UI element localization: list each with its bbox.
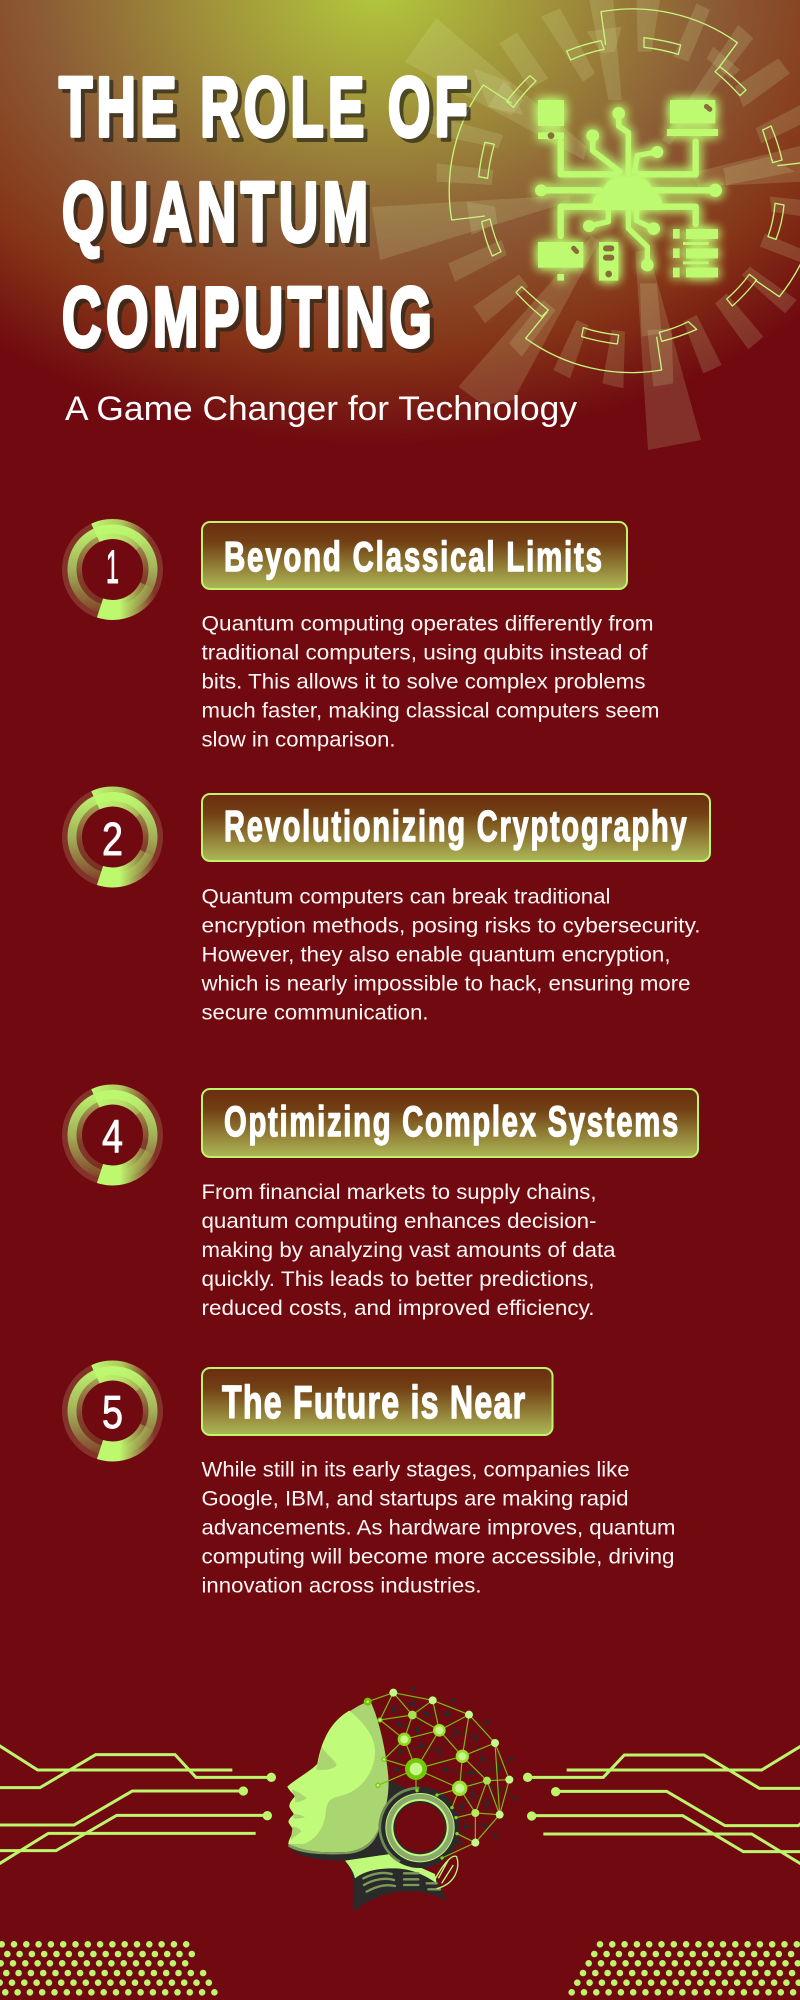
number badge 5 [65,1360,160,1461]
tech ring outlines [449,9,800,373]
body text 2: However, they also enable quantum encryption, [202,943,670,966]
icon: laptop top right [667,100,718,136]
body text 4 [202,1181,616,1320]
top arc [601,9,737,68]
heading box 5: The Future is Near [222,1377,525,1428]
facial shadows [291,1747,337,1840]
number badge 4 [65,1084,160,1185]
body text 4: quantum computing enhances decision- [202,1210,597,1233]
heading box 1: Beyond Classical Limits [224,533,602,580]
heading box 4 [202,1089,698,1157]
title: THE ROLE OF [59,61,468,155]
neural network nodes [364,1689,513,1860]
body text 5 [202,1459,676,1598]
small ring segments [567,41,604,60]
body text 1: Quantum computing operates differently from [202,613,654,636]
number badge 4: 4 [102,1110,123,1162]
heading box 2 [202,794,710,861]
face rim shadow [288,1823,381,1854]
body text 5: advancements. As hardware improves, quantum [202,1517,676,1540]
body text 5: Google, IBM, and startups are making rapid [202,1488,628,1511]
right arc [755,163,800,297]
bottom arc [526,312,662,373]
icon: desktop top left [538,100,564,139]
body text 2 [200,885,700,1024]
chip dome [593,177,663,210]
heading box 4: Optimizing Complex Systems [224,1097,678,1145]
body text 4: making by analyzing vast amounts of data [202,1239,616,1262]
body text 1: bits. This allows it to solve complex problems [202,671,646,694]
icon: quantum chip with connected devices [535,100,722,281]
title [59,61,468,365]
circuit traces [541,113,715,265]
heading box 1 [202,522,627,589]
section 1 [65,519,660,752]
section 4 [65,1084,698,1320]
body text 2: secure communication. [202,1001,428,1024]
secondary dark network [391,1687,518,1845]
header background glow [0,0,800,470]
body text 4: reduced costs, and improved efficiency. [202,1297,594,1320]
icon: list panel [673,229,718,277]
subtitle: A Game Changer for Technology [65,390,577,428]
face front highlight [287,1711,375,1844]
body text 2: Quantum computers can break traditional [202,885,610,908]
body text 2: which is nearly impossible to hack, ensuring more [200,972,690,995]
icon: device bottom left [538,242,583,281]
body text 4: From financial markets to supply chains, [202,1181,596,1204]
face back [287,1701,389,1852]
icon: server tower [599,242,618,281]
jaw shadow [288,1780,408,1861]
head rings [379,1787,460,1868]
title: QUANTUM [62,166,368,260]
left arc [449,85,512,220]
radiating light rays [372,0,800,450]
dot pattern bottom left [0,1944,215,1992]
neck [345,1854,458,1912]
body text 1 [202,613,660,752]
heading box 2: Revolutionizing Cryptography [224,801,687,850]
dot pattern bottom right [572,1944,800,1992]
title: COMPUTING [62,271,432,365]
number badge 1 [65,519,160,620]
body text 5: innovation across industries. [202,1575,482,1598]
number badge 2 [65,786,160,887]
body text 2: encryption methods, posing risks to cybersecurity. [202,914,700,937]
body text 1: slow in comparison. [202,729,396,752]
body text 4: quickly. This leads to better predictions, [202,1268,594,1291]
body text 1: traditional computers, using qubits instead of [202,642,648,665]
section 2 [65,786,710,1024]
number badge 1: 1 [106,540,119,593]
circuit lines left [0,1745,276,1864]
body text 5: While still in its early stages, companies like [202,1459,630,1482]
section 5 [65,1360,676,1598]
number badge 5: 5 [102,1386,123,1438]
icon cutouts [548,103,713,277]
AI head illustration [287,1687,518,1912]
body text 5: computing will become more accessible, driving [202,1546,674,1569]
circuit lines right [523,1746,800,1864]
number badge 2: 2 [102,813,123,865]
heading box 5 [202,1368,552,1435]
body text 1: much faster, making classical computers seem [202,700,660,723]
neural network links [368,1693,509,1858]
